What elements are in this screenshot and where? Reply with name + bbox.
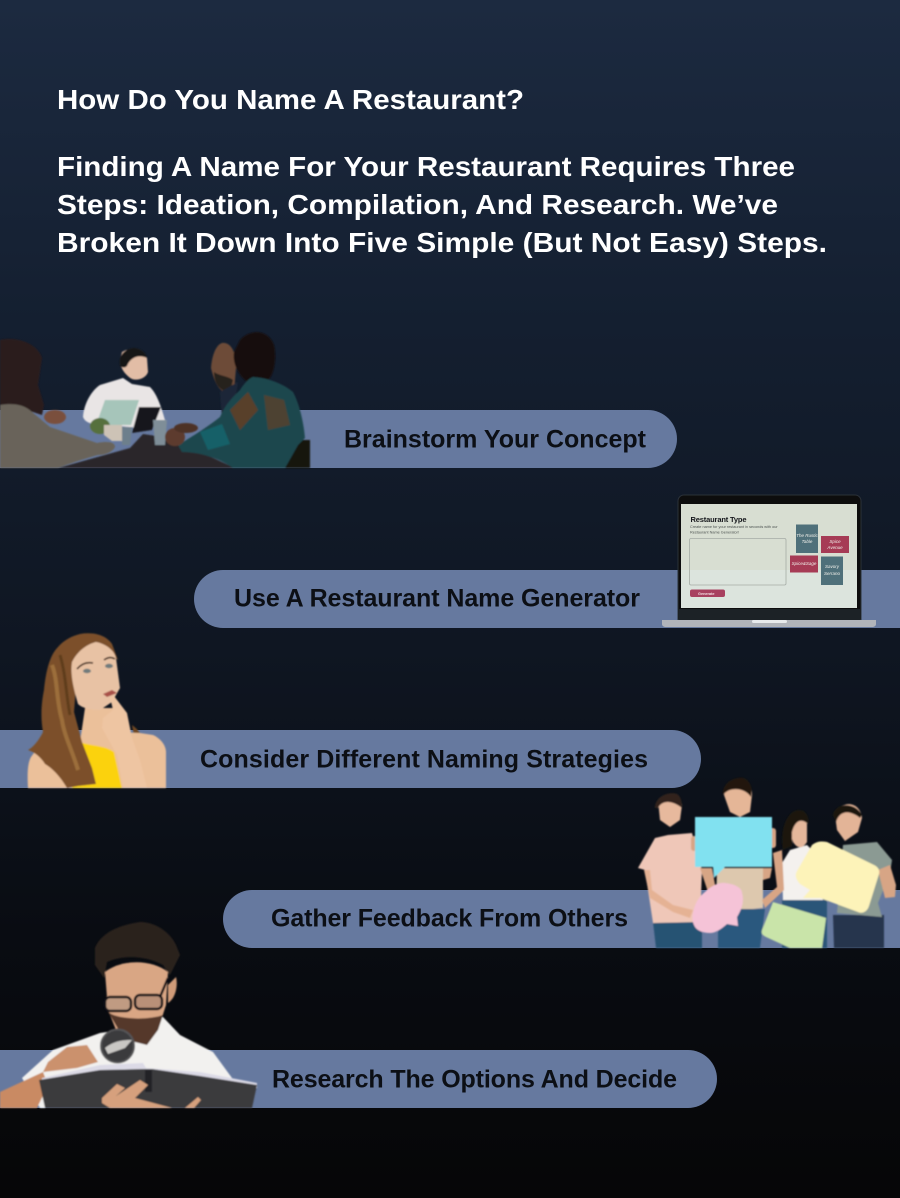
- name cards: Avenue: [826, 545, 843, 550]
- name cards: Table: [802, 539, 813, 544]
- input box: [690, 538, 786, 585]
- intro paragraph: Finding A Name For Your Restaurant Requires Three: [57, 151, 795, 182]
- step 2 bar: [194, 570, 900, 628]
- generate button: [690, 590, 725, 597]
- photo: thinking woman: [28, 633, 166, 788]
- photo: four people with speech bubbles: [638, 778, 896, 948]
- intro paragraph: Broken It Down Into Five Simple (But Not Easy) Steps.: [57, 227, 827, 258]
- screen description: Create name for your restaurant in seconds with our: [690, 525, 778, 529]
- title: How Do You Name A Restaurant?: [57, 84, 524, 115]
- magnifying glass: [101, 1030, 134, 1062]
- name cards: [790, 524, 849, 585]
- screen description: Restaurant Name Generator!: [690, 530, 739, 534]
- screen heading: Restaurant Type: [690, 515, 746, 524]
- cyan speech bubble: [695, 817, 772, 878]
- name cards: Spice&Sage: [792, 561, 817, 566]
- step 1: brainstorm your concept: [0, 332, 677, 468]
- step 1 label: Brainstorm Your Concept: [344, 426, 647, 454]
- yellow speech bubble: [796, 841, 879, 913]
- open book: [39, 1069, 257, 1108]
- name cards: Spice: [829, 539, 841, 544]
- name cards: Savory: [825, 564, 840, 569]
- photo: man reading with magnifying glass: [0, 922, 257, 1108]
- laptop with generator screen: [662, 495, 876, 627]
- pink speech bubble: [692, 883, 743, 933]
- step 1 bar: [0, 410, 677, 468]
- step 3 bar: [0, 730, 701, 788]
- green speech bubble: [762, 902, 826, 948]
- step 3 label: Consider Different Naming Strategies: [200, 746, 648, 774]
- step 4 bar: [223, 890, 900, 948]
- name cards: The Rustic: [796, 533, 818, 538]
- intro paragraph: Steps: Ideation, Compilation, And Research. We’ve: [57, 189, 778, 220]
- screen description: [690, 525, 778, 534]
- step 4: gather feedback from others: [223, 778, 900, 948]
- photo: team meeting at a table: [0, 332, 310, 468]
- intro paragraph: [57, 151, 827, 258]
- step 5 bar: [0, 1050, 717, 1108]
- step 5: research the options and decide: [0, 922, 717, 1108]
- step 5 label: Research The Options And Decide: [272, 1066, 677, 1094]
- step 2 label: Use A Restaurant Name Generator: [234, 584, 640, 612]
- step 2: use a restaurant name generator: [194, 495, 900, 628]
- step 4 label: Gather Feedback From Others: [271, 904, 628, 932]
- step 3: consider different naming strategies: [0, 633, 701, 788]
- name cards: Serrano: [824, 571, 840, 576]
- generate button: Generate: [698, 592, 714, 596]
